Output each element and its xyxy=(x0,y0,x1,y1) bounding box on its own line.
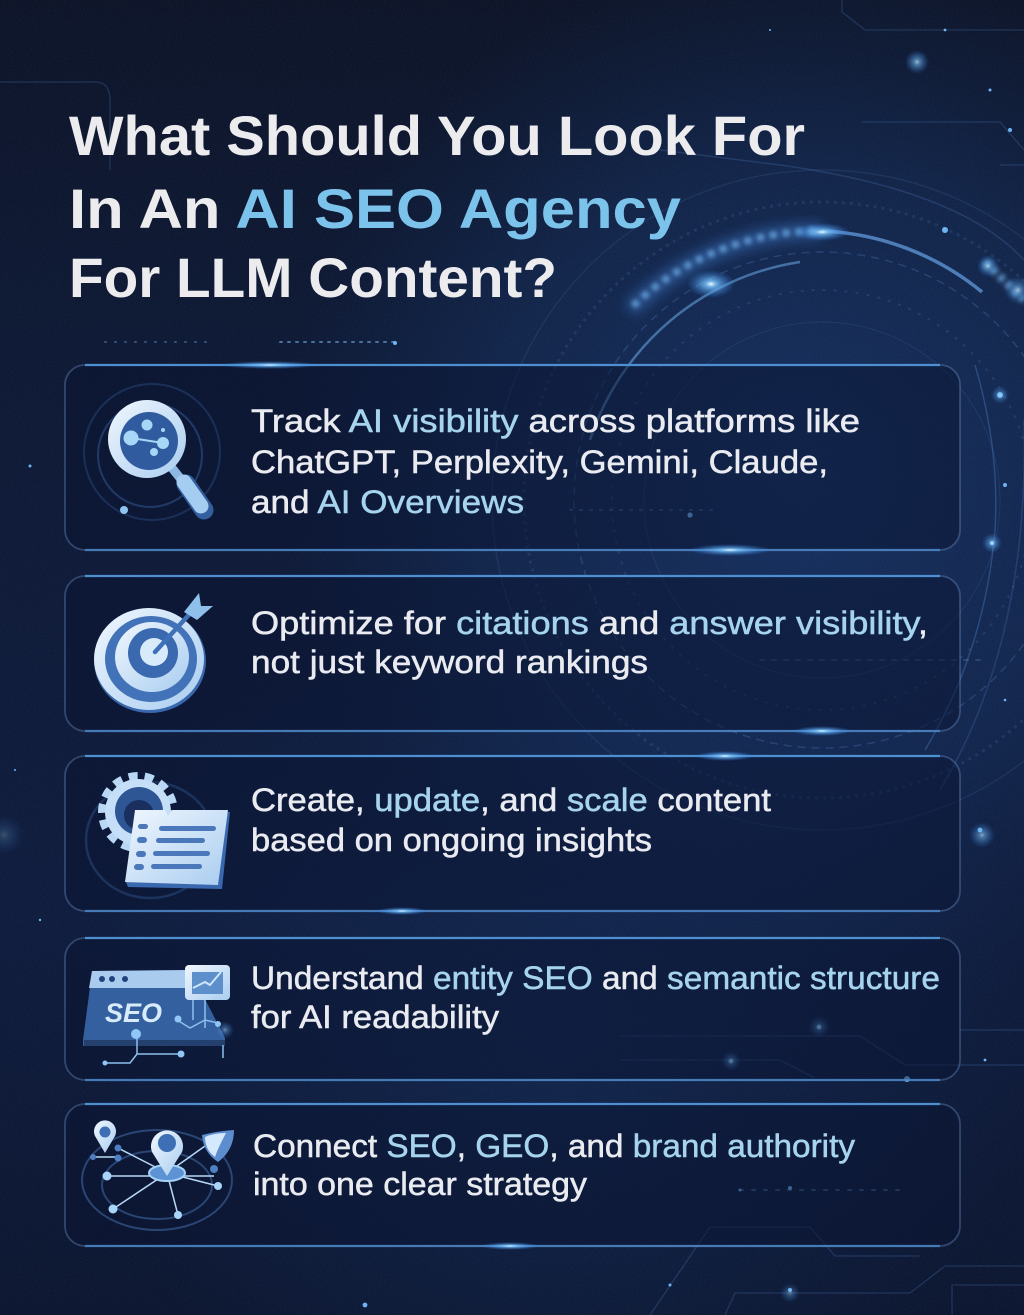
panel: track AI visibility xyxy=(65,361,960,556)
title xyxy=(69,104,805,309)
title: In An AI SEO Agency xyxy=(69,177,681,240)
text: track AI visibility: Track AI visibility across platforms like xyxy=(251,403,860,439)
icon: magnifying glass xyxy=(84,384,220,520)
panel: connect SEO GEO brand xyxy=(65,1104,960,1250)
text: entity SEO xyxy=(251,960,940,1035)
title: What Should You Look For xyxy=(69,104,805,167)
panel: entity SEO xyxy=(65,938,960,1080)
text: connect SEO GEO brand: Connect SEO, GEO, and brand authority xyxy=(253,1128,855,1164)
text: track AI visibility: ChatGPT, Perplexity, Gemini, Claude, xyxy=(251,444,828,480)
dotted data rows xyxy=(105,342,980,1190)
title: For LLM Content? xyxy=(69,246,557,309)
text: entity SEO: Understand entity SEO and semantic structure xyxy=(251,960,940,996)
text: optimize for citations xyxy=(251,605,928,680)
text: create update scale: based on ongoing insights xyxy=(251,822,652,858)
icon: SEO browser window xyxy=(83,965,234,1066)
icon: gear and document xyxy=(86,776,230,898)
concentric tech arcs xyxy=(492,150,1024,830)
text: entity SEO: for AI readability xyxy=(251,999,499,1035)
text: connect SEO GEO brand: into one clear strategy xyxy=(253,1166,587,1202)
text: create update scale xyxy=(251,782,771,858)
text: track AI visibility: and AI Overviews xyxy=(251,484,524,520)
panel: optimize for citations xyxy=(65,576,960,736)
text: optimize for citations: not just keyword rankings xyxy=(251,644,648,680)
text: track AI visibility xyxy=(251,403,860,520)
text: create update scale: Create, update , and scale content xyxy=(251,782,771,818)
icon: target with arrow xyxy=(94,593,213,713)
text: connect SEO GEO brand xyxy=(253,1128,855,1202)
icon: SEO browser window: SEO xyxy=(105,998,162,1028)
icon: location network xyxy=(82,1120,234,1230)
text: optimize for citations: Optimize for citations and answer visibility , xyxy=(251,605,928,641)
panel: create update scale xyxy=(65,751,960,915)
